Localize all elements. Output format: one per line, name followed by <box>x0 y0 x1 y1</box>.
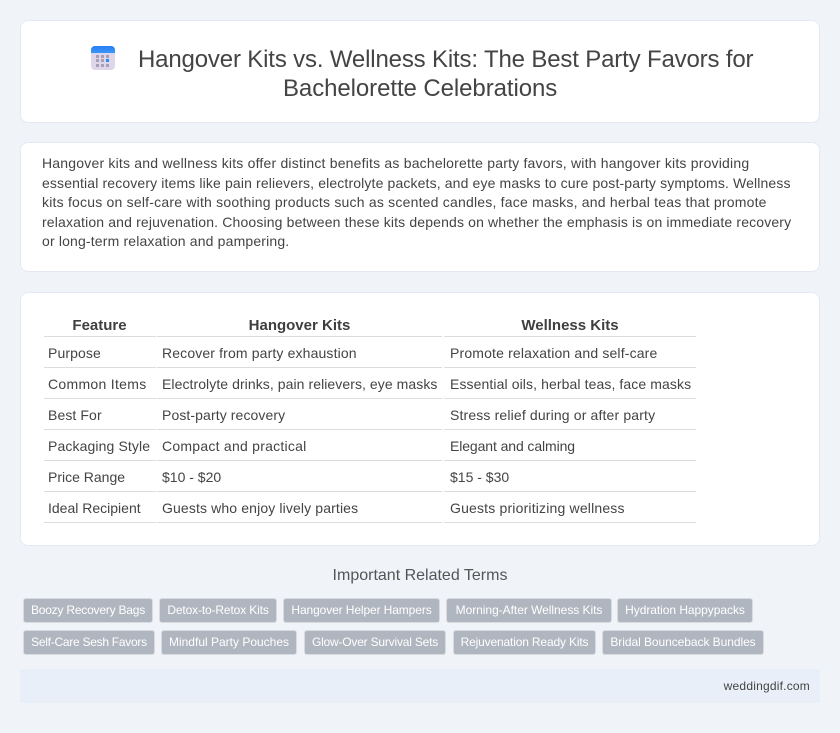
icon: calendar <box>91 46 115 70</box>
table rows: Compact and practical <box>162 438 307 454</box>
table rows: Stress relief during or after party <box>450 407 655 423</box>
title <box>138 46 754 102</box>
related terms tags: Morning-After Wellness Kits <box>456 603 602 617</box>
table rows: Electrolyte drinks, pain relievers, eye masks <box>162 376 437 392</box>
intro paragraph: relaxation and rejuvenation. Choosing between these kits depends on whether the emphasis is on immediate recovery <box>42 214 791 230</box>
table header: Hangover Kits <box>249 317 350 334</box>
table rows: Guests prioritizing wellness <box>450 500 625 516</box>
title: Bachelorette Celebrations <box>283 75 557 102</box>
related terms tags: Glow-Over Survival Sets <box>312 635 438 649</box>
intro paragraph: or long-term relaxation and pampering. <box>42 233 289 249</box>
table rows: $10 - $20 <box>162 469 221 485</box>
table rows: Guests who enjoy lively parties <box>162 500 358 516</box>
related terms tags: Self-Care Sesh Favors <box>31 635 147 649</box>
table header: Wellness Kits <box>521 317 619 334</box>
related terms tags: Mindful Party Pouches <box>169 635 289 649</box>
header panel <box>20 20 820 123</box>
related terms heading: Important Related Terms <box>333 567 507 584</box>
intro paragraph: Hangover kits and wellness kits offer distinct benefits as bachelorette party favors, with hangover kits providing <box>42 155 749 171</box>
table rows: Ideal Recipient <box>48 500 141 516</box>
intro paragraph <box>42 155 792 249</box>
related terms tags: Hangover Helper Hampers <box>291 603 432 617</box>
table rows: Best For <box>48 407 102 423</box>
table rows: Essential oils, herbal teas, face masks <box>450 376 691 392</box>
related terms tags: Boozy Recovery Bags <box>31 603 145 617</box>
table rows: Packaging Style <box>48 438 150 454</box>
related terms tags: Rejuvenation Ready Kits <box>461 635 588 649</box>
related terms tags: Detox-to-Retox Kits <box>167 603 269 617</box>
related terms tags: Bridal Bounceback Bundles <box>610 635 756 649</box>
comparison table panel <box>20 292 820 546</box>
intro paragraph: kits focus on self-care with soothing products such as scented candles, face masks, and herbal teas that promote <box>42 194 767 210</box>
table rows: Price Range <box>48 469 125 485</box>
table header: Feature <box>72 317 127 334</box>
table rows <box>44 336 696 523</box>
table rows: Purpose <box>48 345 101 361</box>
intro text panel <box>20 142 820 272</box>
footer source: weddingdif.com <box>724 679 810 693</box>
related terms tags <box>23 598 764 655</box>
table rows: Post-party recovery <box>162 407 285 423</box>
table header <box>72 317 619 334</box>
table rows: Common Items <box>48 376 147 392</box>
table rows: Elegant and calming <box>450 438 575 454</box>
intro paragraph: essential recovery items like pain relievers, electrolyte packets, and eye masks to cure post-party symptoms. Wellness <box>42 174 791 190</box>
table rows: Recover from party exhaustion <box>162 345 357 361</box>
footer bar <box>20 669 820 703</box>
related terms tags: Hydration Happypacks <box>625 603 745 617</box>
title: Hangover Kits vs. Wellness Kits: The Best Party Favors for <box>138 46 753 73</box>
table rows: $15 - $30 <box>450 469 509 485</box>
table rows: Promote relaxation and self-care <box>450 345 657 361</box>
